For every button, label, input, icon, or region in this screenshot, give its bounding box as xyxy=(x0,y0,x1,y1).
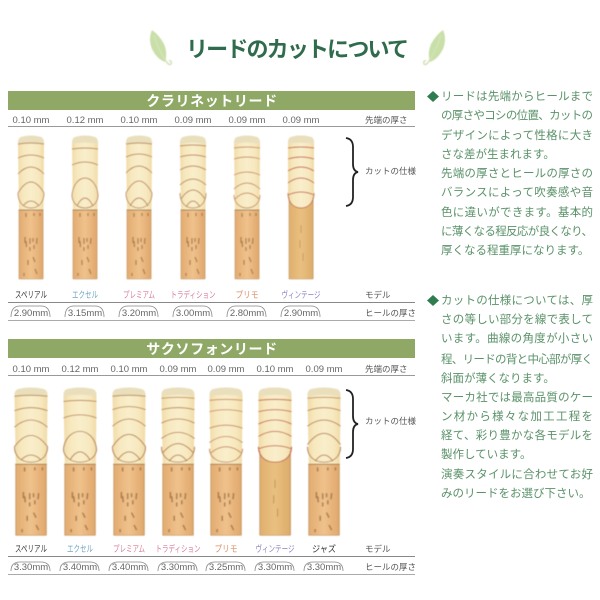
heel thickness row: 3.40mm xyxy=(63,562,97,573)
model names row: スペリアル xyxy=(15,290,47,300)
model names row: トラディション xyxy=(170,289,216,300)
text block: reed description: デザインによって性格に大き xyxy=(441,128,593,142)
model names row: プリモ xyxy=(236,290,258,300)
tip thickness row: 0.12 mm xyxy=(62,364,99,375)
tip thickness row: 0.09 mm xyxy=(229,115,266,126)
text block: reed description: さな差が生まれます。 xyxy=(441,147,555,161)
heel thickness row: 3.40mm xyxy=(112,562,146,573)
text block: reed description: 厚くなる程重厚になります。 xyxy=(441,243,589,257)
reed illustrations: clarinet xyxy=(18,136,314,279)
text block: cut description: 程、リードの背と中心部が厚く xyxy=(441,352,593,366)
tip thickness row: 先端の厚さ xyxy=(365,115,408,125)
text block: cut description xyxy=(427,293,594,500)
model names row: ヴィンテージ xyxy=(282,289,320,300)
heel thickness row: 2.90mm xyxy=(14,308,48,319)
tip thickness row: 0.09 mm xyxy=(208,364,245,375)
heel thickness row: 3.15mm xyxy=(68,308,102,319)
heel thickness row: 3.25mm xyxy=(209,562,243,573)
text block: cut description: います。曲線の角度が小さい xyxy=(441,331,593,345)
model names row: ヴィンテージ xyxy=(256,543,294,554)
text block: cut description: 経て、彩り豊かな各モデルを xyxy=(441,428,593,442)
model names row: トラディション xyxy=(156,543,200,554)
model names row: エクセル xyxy=(67,544,93,554)
model names row: プリモ xyxy=(214,544,238,554)
title: リードのカットについて xyxy=(186,37,409,62)
label: cut spec: カットの仕様 xyxy=(365,166,417,176)
heel thickness row: ヒールの厚さ xyxy=(365,562,416,572)
text block: reed description: の厚さやコシの位置、カットの xyxy=(441,109,593,122)
panel: saxophone reeds xyxy=(8,339,417,575)
text block: reed description: バランスによって吹奏感や音 xyxy=(441,185,593,199)
text block: cut description: 製作しています。 xyxy=(441,447,532,461)
text block: cut description: マーカ社では最高品質のケー xyxy=(441,390,593,404)
label: cut spec: カットの仕様 xyxy=(365,416,417,426)
tip thickness row: 0.09 mm xyxy=(306,364,343,375)
model names row: プレミアム xyxy=(113,544,145,554)
heel thickness row xyxy=(8,306,416,321)
text block: cut description: みのリードをお選び下さい。 xyxy=(441,487,590,500)
model names row xyxy=(8,543,415,557)
heel thickness row: 3.20mm xyxy=(122,308,156,319)
text block: cut description: カットの仕様については、厚 xyxy=(441,293,593,307)
text block: reed description: リードは先端からヒールまで xyxy=(441,89,593,103)
heel thickness row: 2.80mm xyxy=(230,308,264,319)
tip thickness row xyxy=(8,364,415,376)
text block: reed description: に薄くなる程反応が良くなり、 xyxy=(441,224,593,238)
heading bar: clarinet: クラリネットリード xyxy=(146,93,278,109)
text block: reed description: 色に違いができます。基本的 xyxy=(441,205,593,219)
bracket: cut spec xyxy=(346,138,358,206)
heel thickness row: 3.30mm xyxy=(258,562,292,573)
model names row: エクセル xyxy=(72,290,98,300)
heel thickness row: 3.30mm xyxy=(14,562,48,573)
text block: cut description: 演奏スタイルに合わせてお好 xyxy=(441,467,594,481)
model names row: モデル xyxy=(365,544,391,554)
heel thickness row: 3.30mm xyxy=(161,562,195,573)
text block: cut description: 斜面が薄くなります。 xyxy=(441,371,555,385)
heel thickness row: 3.30mm xyxy=(307,562,341,573)
model names row: モデル xyxy=(365,290,391,300)
tip thickness row: 0.09 mm xyxy=(160,364,197,375)
heading bar: clarinet xyxy=(8,91,415,110)
model names row: プレミアム xyxy=(123,290,155,300)
heel thickness row: 3.00mm xyxy=(176,308,210,319)
heel thickness row: ヒールの厚さ xyxy=(365,308,416,318)
icon: right leaf xyxy=(424,30,445,65)
heading bar: saxophone xyxy=(8,339,415,358)
tip thickness row: 0.10 mm xyxy=(111,364,148,375)
text block: cut description: ン材から様々な加工工程を xyxy=(441,409,593,423)
heading bar: saxophone: サクソフォンリード xyxy=(146,341,278,357)
model names row xyxy=(8,289,415,303)
tip thickness row: 0.10 mm xyxy=(13,364,50,375)
panel: clarinet reeds xyxy=(8,91,417,321)
heel thickness row xyxy=(8,562,416,575)
icon: left leaf xyxy=(150,30,171,65)
bracket: cut spec xyxy=(346,390,358,458)
model names row: ジャズ xyxy=(312,543,336,554)
model names row: スペリアル xyxy=(15,544,47,554)
tip thickness row: 0.09 mm xyxy=(175,115,212,126)
heel thickness row: 2.90mm xyxy=(284,308,318,319)
tip thickness row: 0.09 mm xyxy=(283,115,320,126)
tip thickness row: 0.10 mm xyxy=(121,115,158,126)
tip thickness row: 0.12 mm xyxy=(67,115,104,126)
reed illustrations: saxophone xyxy=(14,388,341,535)
tip thickness row: 0.10 mm xyxy=(13,115,50,126)
tip thickness row: 0.10 mm xyxy=(257,364,294,375)
text block: cut description: さの等しい部分を線で表して xyxy=(441,312,593,326)
text block: reed description: 先端の厚さとヒールの厚さの xyxy=(441,166,593,180)
text block: reed description xyxy=(427,89,593,257)
tip thickness row: 先端の厚さ xyxy=(365,364,408,374)
tip thickness row xyxy=(8,115,415,127)
